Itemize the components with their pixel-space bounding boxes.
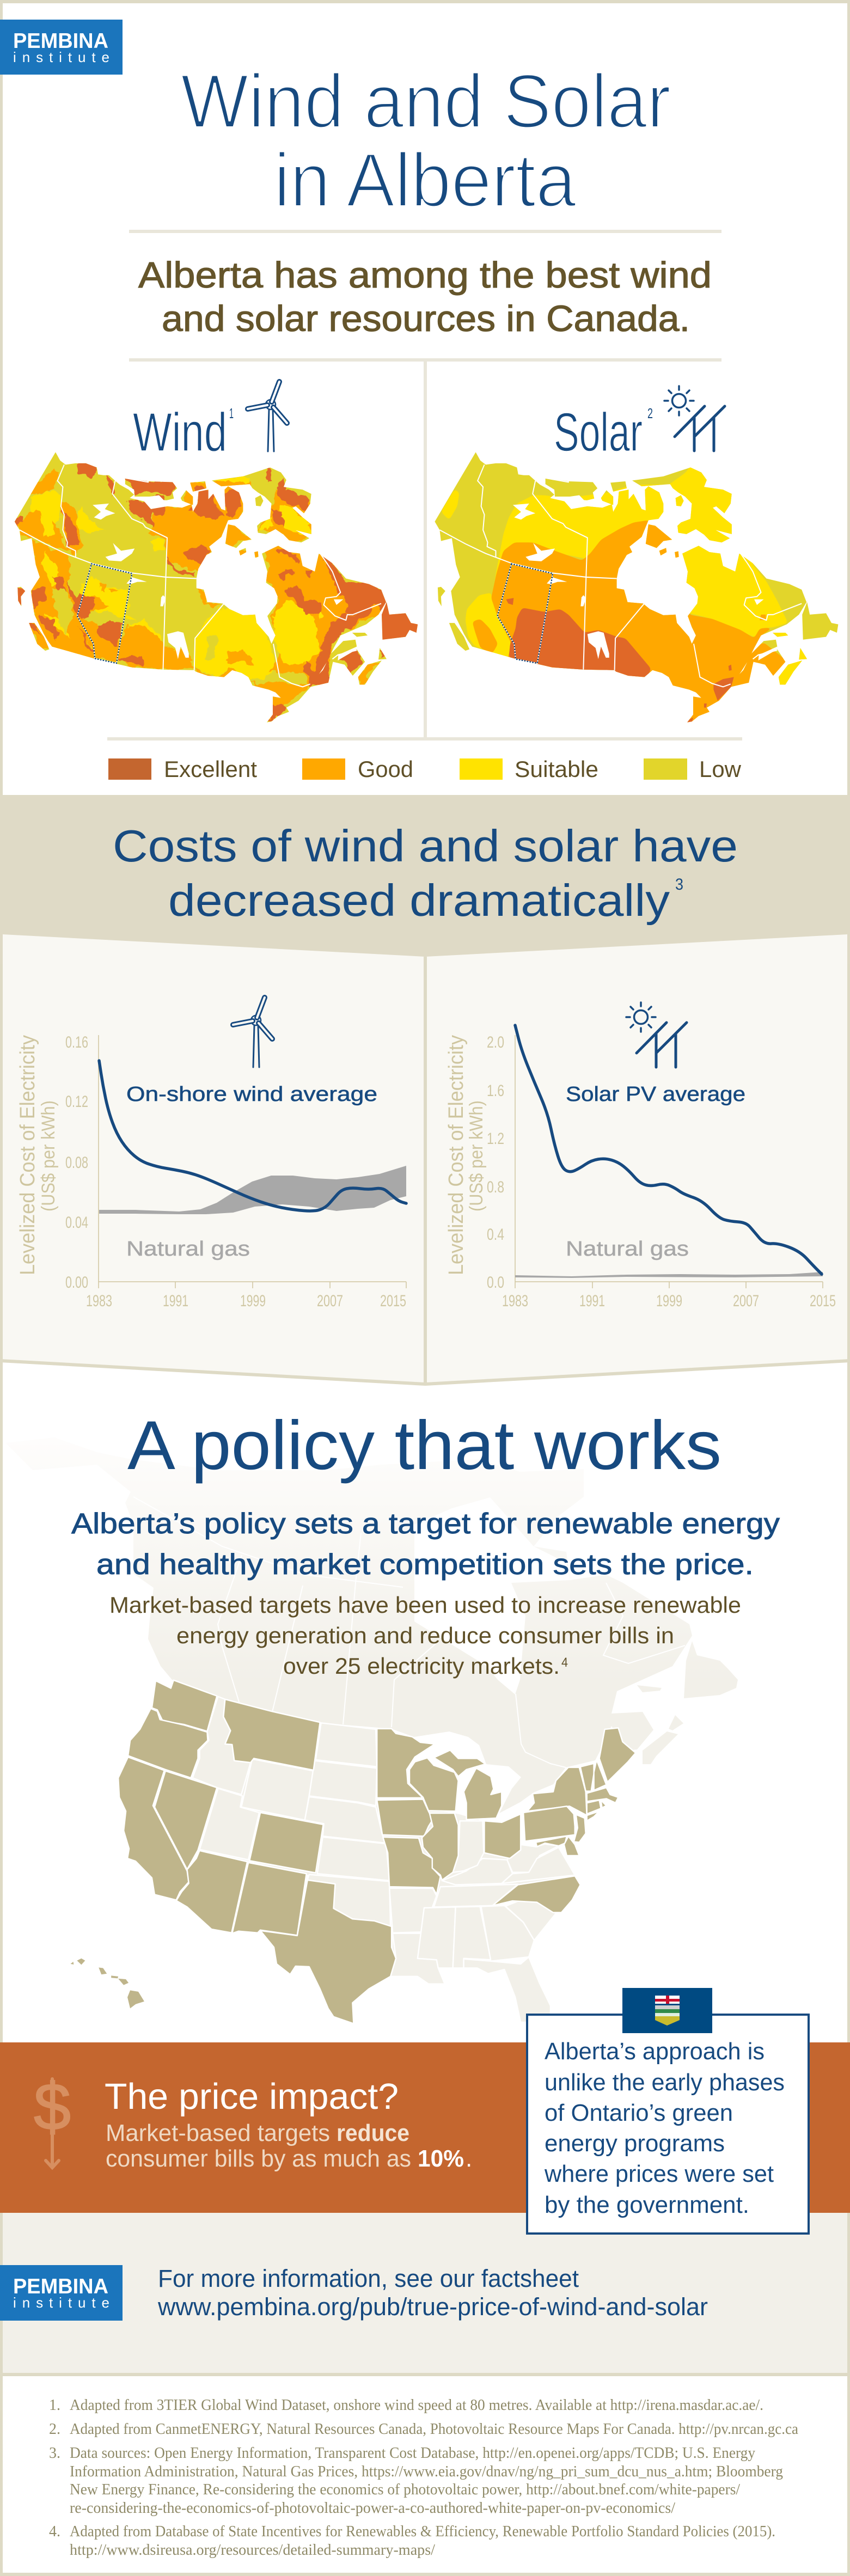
callout: Alberta's approach: by the government. — [545, 2192, 749, 2218]
solar cost line — [515, 1025, 822, 1274]
y tick labels: 2.0 — [487, 1033, 504, 1051]
icon: Alberta flag — [622, 1988, 712, 2033]
x tick labels: 1991 — [579, 1292, 605, 1310]
footnotes: New Energy Finance, Re-considering the economics of photovoltaic power, http://about.bnef.com/white-papers/ — [70, 2481, 740, 2498]
panel: the price impact band — [0, 2042, 850, 2213]
heading: costs decreased: decreased dramatically — [168, 875, 670, 926]
text: the price impact: consumer bills by as much as — [106, 2145, 411, 2172]
title — [181, 58, 671, 223]
text: policy summary: Alberta’s policy sets a target for renewable energy — [71, 1508, 780, 1540]
footnotes: Adapted from 3TIER Global Wind Dataset, onshore wind speed at 80 metres. Available at http://irena.masdar.ac.ae/. — [70, 2397, 763, 2414]
label: solar PV average: Solar PV average — [566, 1083, 745, 1106]
y tick labels: 0.08 — [65, 1154, 88, 1172]
logo: Pembina Institute (bottom): PEMBINA — [13, 2275, 108, 2298]
heading: Wind: 1 — [229, 405, 234, 421]
map: wind resources in Canada — [14, 452, 418, 723]
footnotes: Information Administration, Natural Gas Prices, https://www.eia.gov/dnav/ng/ng_pri_sum_dcu_nus_a.htm; Bloomberg — [70, 2463, 783, 2480]
x tick labels: 1983 — [502, 1292, 528, 1310]
callout: Alberta's approach: Alberta’s approach is — [545, 2038, 765, 2065]
x tick labels — [86, 1292, 406, 1310]
icon: dollar with down arrow: $ — [34, 2070, 71, 2144]
icon: sun and solar panels — [664, 386, 725, 451]
label: natural gas: Natural gas — [566, 1238, 689, 1261]
footnotes: 1. — [49, 2397, 60, 2414]
text: the price impact: . — [466, 2145, 472, 2172]
y axis title — [16, 1035, 59, 1275]
y tick labels: 0.12 — [65, 1093, 88, 1111]
logo: Pembina Institute (top): institute — [13, 49, 109, 65]
x tick labels: 1991 — [163, 1292, 188, 1310]
y tick labels: 1.6 — [487, 1082, 504, 1100]
title: in Alberta — [274, 137, 576, 223]
x tick labels: 2007 — [317, 1292, 343, 1310]
x tick labels: 2007 — [733, 1292, 759, 1310]
x tick labels — [502, 1292, 836, 1310]
y tick labels: 0.0 — [487, 1274, 504, 1292]
y tick labels — [65, 1033, 88, 1292]
chart: solar PV vs natural gas — [445, 1025, 836, 1310]
y axis title: (US$ per kWh) — [38, 1100, 59, 1211]
y axis title: (US$ per kWh) — [466, 1100, 487, 1211]
y tick labels — [487, 1033, 504, 1292]
legend: Suitable — [515, 756, 598, 782]
x tick labels: 1999 — [240, 1292, 266, 1310]
text: policy summary: and healthy market competition sets the price. — [96, 1549, 754, 1581]
y axis title: Levelized Cost of Electricity — [445, 1035, 468, 1275]
natural gas band — [515, 1272, 823, 1278]
text: market-based targets — [109, 1592, 741, 1679]
footnotes: Adapted from CanmetENERGY, Natural Resources Canada, Photovoltaic Resource Maps For Canada. http://pv.nrcan.gc.ca — [70, 2421, 799, 2438]
faded map: Canada behind text — [5, 1437, 738, 1813]
subheading: best resources: and solar resources in Canada. — [162, 298, 690, 339]
natural gas band — [99, 1166, 406, 1214]
callout: Alberta's approach — [527, 2015, 809, 2234]
icon: wind turbine — [248, 382, 287, 451]
wind cost line — [99, 1061, 406, 1211]
legend — [108, 756, 742, 782]
callout: Alberta's approach: where prices were set — [544, 2161, 774, 2187]
callout: Alberta's approach: of Ontario’s green — [545, 2100, 733, 2126]
y axis title: Levelized Cost of Electricity — [16, 1035, 39, 1275]
text: market-based targets: over 25 electricity markets. — [283, 1653, 560, 1679]
footnotes: Data sources: Open Energy Information, Transparent Cost Database, http://en.openei.org/apps/TCDB; U.S. Energy — [70, 2445, 755, 2462]
footnotes: http://www.dsireusa.org/resources/detailed-summary-maps/ — [70, 2542, 435, 2559]
text: more information: www.pembina.org/pub/true-price-of-wind-and-solar — [157, 2293, 708, 2321]
panel: costs band — [0, 795, 850, 964]
legend: Good — [358, 756, 413, 782]
heading: Solar: 2 — [647, 405, 653, 421]
x tick labels: 2015 — [380, 1292, 406, 1310]
y tick labels: 0.8 — [487, 1178, 504, 1196]
icon: wind turbine (chart) — [233, 998, 272, 1067]
title: Wind and Solar — [181, 58, 671, 144]
panel: charts background — [3, 934, 847, 1383]
map: solar resources in Canada — [435, 452, 839, 723]
label: natural gas: Natural gas — [126, 1238, 250, 1261]
text: more information — [157, 2265, 708, 2321]
heading: a policy that works: A policy that works — [127, 1406, 721, 1484]
text: the price impact — [105, 2076, 472, 2172]
panel: footer background — [3, 2213, 847, 2373]
text: the price impact: The price impact? — [105, 2076, 399, 2117]
y tick labels: 0.04 — [65, 1214, 88, 1232]
footnotes: re-considering-the-economics-of-photovoltaic-power-a-co-authored-white-paper-on-pv-economics/ — [70, 2500, 675, 2517]
map: US states with market-based targets — [70, 1680, 635, 2024]
callout: Alberta's approach: unlike the early phases — [545, 2069, 785, 2096]
label: on-shore wind average: On-shore wind average — [126, 1083, 377, 1106]
legend: Low — [699, 756, 742, 782]
heading: Solar: Solar — [554, 402, 643, 463]
x tick labels: 1999 — [656, 1292, 682, 1310]
footnotes: 4. — [49, 2523, 60, 2540]
chart: on-shore wind vs natural gas — [16, 1033, 406, 1310]
text: market-based targets: energy generation and reduce consumer bills in — [176, 1623, 674, 1648]
footnotes: 3. — [49, 2445, 60, 2462]
logo: Pembina Institute (bottom): institute — [13, 2294, 109, 2311]
text: the price impact: reduce — [337, 2120, 409, 2146]
states without targets — [193, 1697, 575, 2022]
icon: sun and panels (chart) — [626, 1002, 687, 1067]
heading: Wind: Wind — [133, 402, 227, 463]
text: market-based targets: Market-based targets have been used to increase renewable — [109, 1592, 741, 1618]
subheading: best resources: Alberta has among the best wind — [138, 255, 712, 296]
states with targets — [118, 1680, 635, 2024]
y tick labels: 0.00 — [65, 1274, 88, 1292]
footnotes: Adapted from Database of State Incentives for Renewables & Efficiency, Renewable Portfolio Standard Policies (2015). — [70, 2523, 775, 2540]
y tick labels: 1.2 — [487, 1130, 504, 1148]
y tick labels: 0.16 — [65, 1033, 88, 1051]
heading: costs decreased: Costs of wind and solar have — [113, 821, 738, 871]
logo: Pembina Institute (bottom) — [0, 2265, 123, 2321]
text: market-based targets: 4 — [561, 1655, 568, 1670]
x tick labels: 1983 — [86, 1292, 112, 1310]
callout: Alberta's approach: energy programs — [545, 2130, 725, 2157]
legend: Excellent — [164, 756, 257, 782]
x tick labels: 2015 — [810, 1292, 836, 1310]
text: policy summary — [71, 1508, 780, 1581]
y tick labels: 0.4 — [487, 1226, 504, 1244]
y axis title — [445, 1035, 487, 1275]
logo: Pembina Institute (top): PEMBINA — [13, 29, 108, 53]
footnotes: 2. — [49, 2421, 60, 2438]
text: the price impact: Market-based targets — [106, 2120, 330, 2146]
text: the price impact: 10% — [418, 2145, 464, 2172]
heading: costs decreased: 3 — [675, 876, 683, 894]
heading: costs decreased — [113, 821, 738, 926]
logo: Pembina Institute (top) — [0, 20, 123, 75]
text: more information: For more information, see our factsheet — [158, 2265, 579, 2292]
footnotes — [49, 2397, 799, 2559]
subheading: best resources — [138, 255, 712, 339]
Hawaii — [70, 1959, 144, 2008]
